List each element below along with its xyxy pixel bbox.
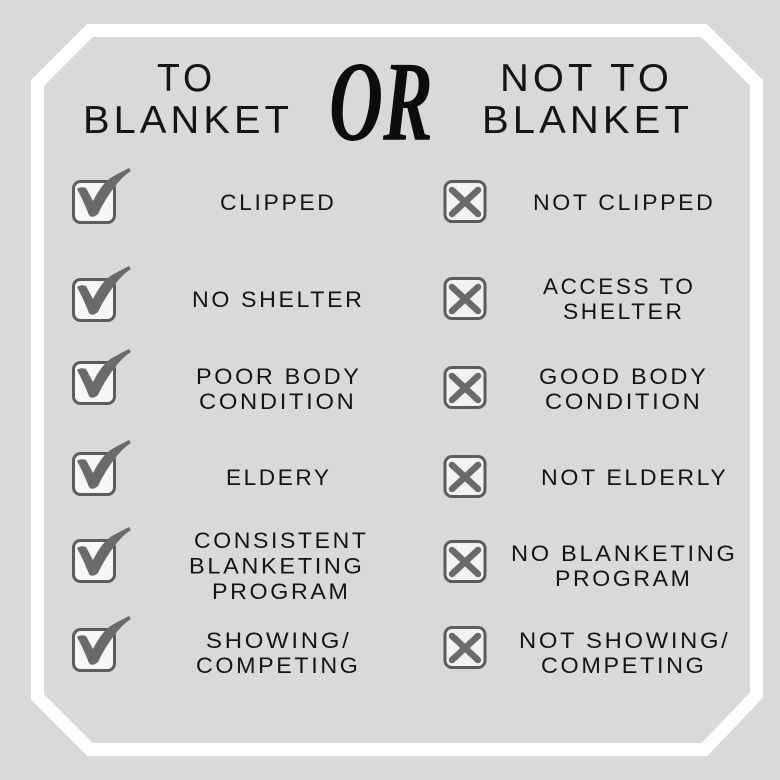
label: not showing competing: NOT SHOWING/ — [519, 628, 730, 653]
icon: check 1 — [74, 168, 131, 222]
label: consistent blanketing program: BLANKETING — [189, 554, 364, 578]
label: showing competing: SHOWING/ — [206, 628, 352, 653]
label: not showing competing — [519, 628, 730, 678]
label: poor body condition: CONDITION — [199, 389, 356, 414]
label: no shelter: NO SHELTER — [192, 287, 364, 312]
icon: check 3 — [74, 349, 131, 404]
label: clipped: CLIPPED — [220, 190, 336, 215]
icon: cross 5 — [445, 542, 485, 582]
label: consistent blanketing program: CONSISTENT — [194, 528, 368, 553]
label: good body condition: GOOD BODY — [539, 364, 708, 389]
icon: cross 4 — [445, 456, 485, 496]
icon: cross 1 — [445, 182, 485, 222]
icon: check 2 — [74, 266, 131, 320]
icon: cross 6 — [445, 628, 485, 668]
heading: to blanket: TO — [157, 57, 216, 100]
label: eldery: ELDERY — [226, 465, 332, 490]
label: poor body condition: POOR BODY — [196, 364, 362, 389]
label: no blanketing program: NO BLANKETING — [511, 541, 738, 566]
label: no blanketing program — [511, 541, 738, 591]
label: poor body condition — [196, 364, 362, 414]
label: consistent blanketing program: PROGRAM — [212, 579, 350, 604]
heading: to blanket — [83, 57, 293, 142]
label: access to shelter — [543, 274, 696, 324]
label: not clipped: NOT CLIPPED — [533, 190, 716, 215]
script word: or: OR — [329, 38, 433, 165]
icon: cross 2 — [445, 278, 485, 318]
heading: not to blanket: BLANKET — [482, 99, 693, 142]
label: good body condition — [539, 364, 708, 414]
label: access to shelter: ACCESS TO — [543, 274, 696, 299]
label: not elderly: NOT ELDERLY — [541, 465, 728, 490]
heading: to blanket: BLANKET — [83, 99, 293, 142]
label: good body condition: CONDITION — [545, 389, 702, 414]
label: no blanketing program: PROGRAM — [555, 566, 692, 591]
heading: not to blanket: NOT TO — [500, 57, 673, 100]
heading: not to blanket — [482, 57, 693, 142]
icon: cross 3 — [445, 368, 485, 408]
label: showing competing: COMPETING — [196, 653, 360, 678]
label: showing competing — [196, 628, 360, 678]
label: not showing competing: COMPETING — [541, 653, 706, 678]
label: access to shelter: SHELTER — [563, 299, 684, 324]
icon: check 4 — [74, 440, 131, 494]
label: consistent blanketing program — [189, 528, 368, 604]
icon: check 5 — [74, 527, 131, 582]
icon: check 6 — [74, 616, 131, 670]
